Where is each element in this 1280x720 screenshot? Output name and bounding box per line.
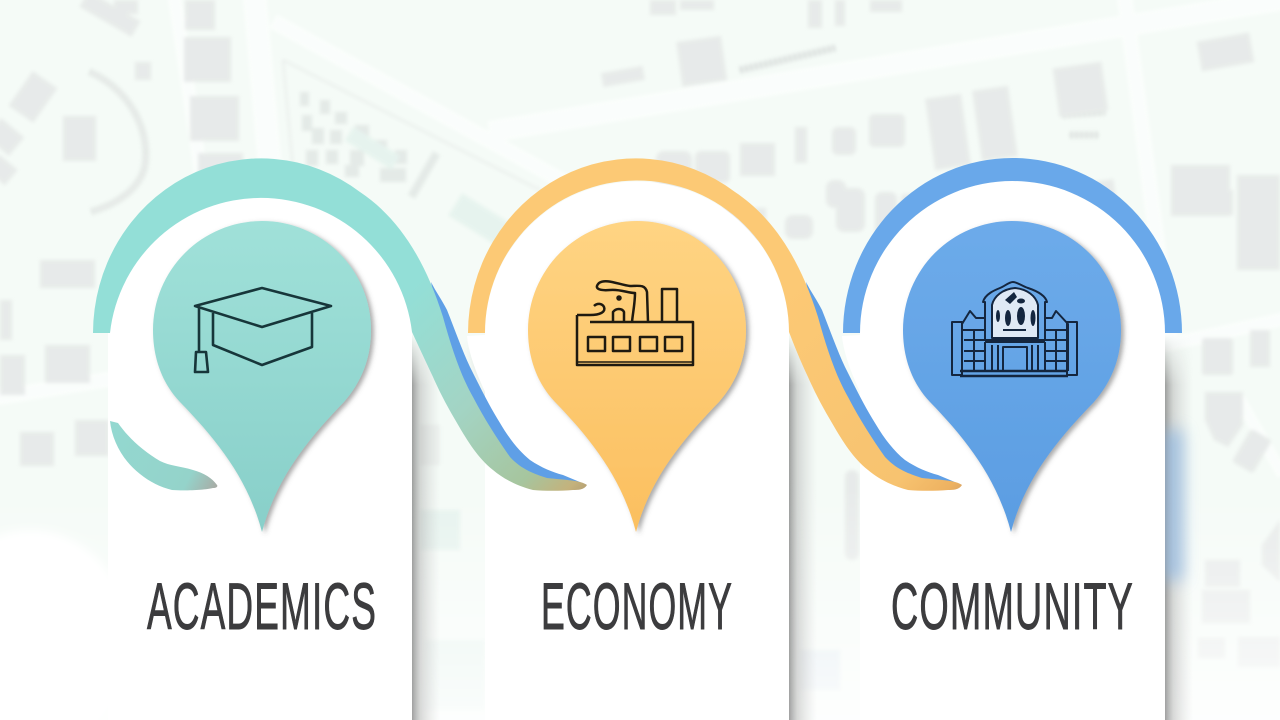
panel: community card	[842, 181, 1165, 720]
card drop shadows	[412, 335, 1193, 720]
ribbon: community blue arc	[843, 158, 1182, 333]
pin: economy	[528, 221, 746, 532]
ribbon: blue underlay first curve	[431, 282, 587, 485]
icon: community building	[952, 282, 1077, 376]
ribbon: economy orange	[468, 158, 962, 491]
panel: academics card	[108, 180, 412, 720]
ribbon: blue underlay second curve	[806, 282, 962, 485]
heading: academics: ACADEMICS	[147, 569, 377, 643]
pin: community	[903, 221, 1121, 532]
pin: academics	[153, 221, 371, 532]
icon: factory	[577, 281, 693, 365]
ribbon: academics tail	[110, 421, 217, 490]
icon: graduation cap	[195, 288, 331, 372]
heading: economy: ECONOMY	[541, 569, 733, 643]
ribbon: academics teal	[93, 158, 587, 491]
panel: economy card	[467, 181, 789, 720]
